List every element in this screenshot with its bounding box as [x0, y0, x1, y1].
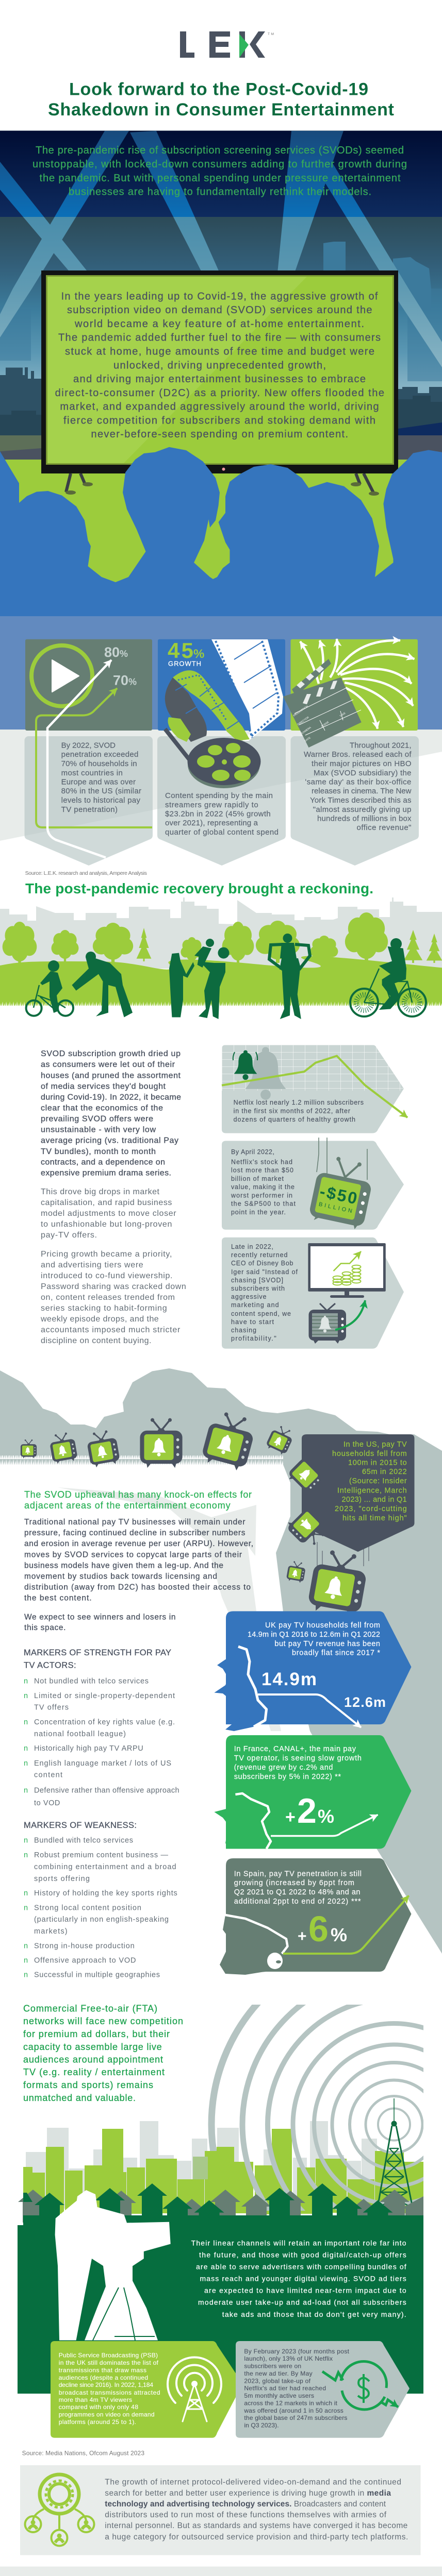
- stat card 3: Warner Bros. released each of: [304, 750, 412, 759]
- houses: [18, 2190, 423, 2227]
- panel: clapperboard illustration: [291, 639, 418, 731]
- heading: commercial FTA: Commercial Free-to-air (FTA): [23, 2003, 157, 2013]
- callout: public service broadcasting: transmissions that draw mass: [59, 2367, 146, 2374]
- stat card 3: Throughout 2021,: [350, 741, 412, 750]
- body text: SVOD growth: of media services they'd bought: [41, 1082, 166, 1091]
- panel: media technology: [20, 2465, 421, 2555]
- icon: falling TV with -$50 billion: BILLION: [318, 1201, 353, 1214]
- callout: Netflix ad tier: [236, 2341, 410, 2438]
- audience silhouettes: [0, 447, 442, 616]
- callout: Netflix stock: point in the year.: [231, 1209, 286, 1216]
- intro text: The pre-pandemic rise of subscription screening services (SVODs) seemed: [36, 145, 404, 156]
- callout: UK pay TV households: 14.9m: [261, 1669, 317, 1689]
- icons: tumbling TVs beside callout: [284, 1451, 370, 1618]
- cameraman silhouette: [55, 2190, 171, 2340]
- heading: commercial FTA: capacity to assemble large live: [23, 2042, 162, 2052]
- callout: Netflix ad tier: across the 12 markets in which it: [244, 2400, 338, 2407]
- body text: traditional pay TV: the best content.: [24, 1594, 92, 1603]
- text: linear channels: mass reach and younger digital viewing. SVOD ad tiers: [200, 2275, 406, 2283]
- radio tower: [378, 2098, 413, 2208]
- icon: falling TV with -$50 billion: -$50: [318, 1182, 359, 1208]
- text: linear channels: moderate user take-up and ad-load (not all subscribers: [198, 2298, 406, 2306]
- floor: [0, 460, 442, 583]
- callout: France CANAL+: %: [318, 1806, 334, 1827]
- callout: Netflix ad tier: in Q3 2023).: [244, 2421, 279, 2429]
- section heading: SVOD upheaval: The SVOD upheaval has many knock-on effects for: [24, 1489, 252, 1500]
- body text: SVOD growth: series stacking to habit-forming: [41, 1304, 167, 1313]
- callout: Disney profitability: Iger said "Instead of: [231, 1268, 298, 1276]
- callout: Netflix ad tier: 2023, global take-up of: [244, 2377, 311, 2384]
- panel: SVOD penetration illustration: 80%: [104, 645, 128, 660]
- stat card 1: penetration exceeded: [61, 750, 138, 759]
- callout: Netflix stock: value, making it the: [231, 1183, 294, 1191]
- stat card 1: Europe and was over: [61, 778, 136, 787]
- list: markers of weakness: Strong local content position: [34, 1904, 141, 1912]
- callout: Netflix ad tier: Netflix's ad tier had reached: [244, 2385, 326, 2392]
- panel: 45% growth illustration: GROWTH: [168, 659, 201, 668]
- callout: France CANAL+: +: [285, 1807, 296, 1827]
- callout: US pay TV households: 2023, "cord-cutting: [335, 1505, 407, 1513]
- stat card 2: quarter of global content spend: [165, 828, 279, 837]
- list: markers of weakness: n: [24, 1837, 28, 1845]
- body text: SVOD growth: contracts, and a dependence on: [41, 1158, 165, 1166]
- text: linear channels: are able to serve advertisers with compelling bundles of: [196, 2263, 406, 2271]
- body text: SVOD growth: and advertising tiers were: [41, 1261, 143, 1269]
- icons: falling TVs: [21, 1409, 296, 1472]
- text: linear channels: Their linear channels will retain an important role far into: [191, 2239, 406, 2247]
- list: markers of strength: n: [24, 1787, 28, 1795]
- body text: SVOD growth: unsustainable - with very low: [41, 1126, 156, 1134]
- body text: SVOD growth: SVOD subscription growth dried up: [41, 1049, 181, 1058]
- arrow lines: growth: [36, 660, 152, 857]
- body text: SVOD growth: This drove big drops in market: [41, 1188, 160, 1196]
- heading: commercial FTA: unmatched and valuable.: [23, 2093, 136, 2103]
- list: markers of weakness: Bundled with telco services: [34, 1837, 133, 1845]
- callout: Disney profitability: chasing [SVOD]: [231, 1277, 283, 1284]
- icon: clapperboard with bursting arrows: CAMERA: [301, 726, 312, 735]
- intro text: unstoppable, with locked-down consumers adding to further growth during: [32, 159, 407, 170]
- heading: commercial FTA: TV (e.g. reality / entertainment: [23, 2067, 165, 2077]
- map: Spain: [220, 1915, 290, 1975]
- callout: public service broadcasting: in the UK still dominates the list of: [59, 2359, 159, 2366]
- icon: clapperboard with bursting arrows: DATE: [304, 736, 312, 743]
- stat card 3: York Times described this as: [310, 796, 412, 805]
- text: media technology services: technology and advertising technology services. Broadcasters and content: [105, 2500, 386, 2509]
- list: markers of weakness: Offensive approach to VOD: [34, 1957, 136, 1965]
- text: linear channels: [191, 2239, 406, 2318]
- callout: public service broadcasting: programmes on video on demand: [59, 2411, 155, 2418]
- callout: Netflix stock: the S&P500 to that: [231, 1200, 296, 1208]
- illustration: park scene with families: [0, 897, 442, 1019]
- callout: Netflix stock: billion of market: [231, 1175, 284, 1182]
- callout: Disney profitability: aggressive: [231, 1293, 267, 1300]
- body text: SVOD growth: Password sharing was cracked down: [41, 1282, 186, 1291]
- callout: public service broadcasting: audiences (despite a continued: [59, 2374, 148, 2381]
- icon: clapperboard with bursting arrows: TAKE: [339, 711, 347, 718]
- panel: 45% growth illustration: 45: [168, 638, 193, 663]
- list: markers of weakness: [24, 1821, 177, 1979]
- icon: antenna: [168, 2357, 221, 2421]
- tv screen text: stuck at home, huge amounts of free time and budget were: [65, 346, 374, 358]
- icon: clapperboard with bursting arrows: [283, 639, 415, 748]
- stat card 2: $23.2bn in 2022 (45% growth: [165, 810, 271, 818]
- body text: SVOD growth: introduced to co-fund viewership.: [41, 1272, 172, 1280]
- callout: France CANAL+: In France, CANAL+, the main pay: [234, 1745, 356, 1753]
- callout: France CANAL+: TV operator, is seeing slow growth: [234, 1754, 362, 1762]
- list: markers of strength: Defensive rather than offensive approach: [34, 1787, 179, 1795]
- body text: SVOD growth: TV bundles), month to month: [41, 1147, 156, 1156]
- body text: traditional pay TV: Traditional national pay TV businesses will remain under: [24, 1518, 245, 1527]
- list: markers of strength: English language market / lots of US: [34, 1759, 171, 1768]
- list: markers of strength: TV offers: [34, 1704, 69, 1712]
- map: France: [214, 1793, 271, 1849]
- heading: commercial FTA: networks will face new competition: [23, 2016, 183, 2026]
- callout: Disney profitability: have to start: [231, 1318, 274, 1326]
- callout: US pay TV households: 65m in 2022: [362, 1468, 407, 1476]
- body text: traditional pay TV: business models have given them a leg-up. And the: [24, 1561, 223, 1570]
- callout: Disney profitability: recently returned: [231, 1251, 288, 1259]
- stat card 3: [291, 736, 419, 866]
- body text: SVOD growth: clear that the economics of the: [41, 1104, 163, 1113]
- list: markers of weakness: n: [24, 1904, 28, 1912]
- callout: France CANAL+: (revenue grew by c.2% and: [234, 1764, 333, 1772]
- body text: SVOD growth: during Covid-19). In 2022, it became: [41, 1093, 181, 1101]
- tv screen text: unlocked, driving unprecedented growth,: [113, 360, 326, 371]
- panel: SVOD penetration illustration: 70%: [113, 673, 137, 688]
- stat card 2: Content spending by the main: [165, 791, 273, 800]
- panel: 45% growth illustration: %: [193, 647, 204, 661]
- logo: L.E.K.: TM: [268, 32, 274, 36]
- body text: SVOD growth: expensive premium drama series.: [41, 1168, 171, 1177]
- text: media technology services: internal personnel. But as standards and systems have converged it has become: [105, 2521, 407, 2530]
- text: media technology services: distributors used to run most of these functions themselves with armies of: [105, 2511, 387, 2519]
- list: markers of weakness: n: [24, 1889, 28, 1897]
- callout: France CANAL+: subscribers by 5% in 2022) **: [234, 1773, 341, 1781]
- callout: US pay TV households: 100m in 2015 to: [348, 1459, 407, 1467]
- body text: SVOD growth: pay-TV offers.: [41, 1231, 97, 1240]
- body text: SVOD growth: model adjustments to move closer: [41, 1209, 176, 1218]
- stat card 1: most countries in: [61, 769, 123, 777]
- stat card 1: 70% of households in: [61, 759, 137, 768]
- tv screen text: In the years leading up to Covid-19, the aggressive growth of: [61, 291, 378, 302]
- stat card 2: over 2021), representing a: [165, 819, 258, 827]
- list: markers of strength: content: [34, 1771, 62, 1780]
- body text: SVOD growth: weekly episode drops, and the: [40, 1315, 159, 1324]
- callout: Netflix subscribers: dozens of quarters of healthy growth: [234, 1116, 355, 1123]
- text: linear channels: take ads and those that do don't get very many).: [222, 2310, 406, 2318]
- callout: US pay TV households: (Source: Insider: [349, 1477, 407, 1485]
- tv screen text: subscription video on demand (SVOD) services around the: [67, 304, 372, 316]
- stat card 1: TV penetration): [61, 805, 118, 814]
- callout: Netflix subscribers: in the first six months of 2022, after: [234, 1108, 350, 1115]
- list: markers of weakness: n: [24, 1971, 28, 1979]
- body text: SVOD growth: to unfashionable but long-proven: [41, 1220, 172, 1229]
- list: markers of weakness: combining entertainment and a broad: [34, 1863, 176, 1871]
- callout: public service broadcasting: Public Service Broadcasting (PSB): [59, 2352, 158, 2359]
- callout: Spain pay TV penetration: In Spain, pay TV penetration is still: [234, 1870, 362, 1878]
- callout: Netflix ad tier: was offered (around 1 in 50 across: [243, 2407, 343, 2414]
- heading: commercial FTA: [23, 2003, 183, 2103]
- heading: post-pandemic recovery: The post-pandemic recovery brought a reckoning.: [25, 880, 373, 896]
- stat card 3: office revenue": [357, 823, 412, 832]
- callout: Spain pay TV penetration: %: [331, 1924, 347, 1945]
- callout: UK pay TV households: 12.6m: [344, 1694, 386, 1710]
- icon: falling TV with -$50 billion: [308, 1154, 376, 1231]
- stat card 3: hundreds of millions in box: [317, 814, 412, 823]
- callout: public service broadcasting: decline since 2016). In 2022, 1,184: [59, 2381, 153, 2388]
- stat card 2: streamers grew rapidly to: [165, 801, 258, 809]
- list: markers of strength: Not bundled with telco services: [34, 1677, 149, 1686]
- heading: commercial FTA: for premium ad dollars, but their: [23, 2029, 170, 2039]
- callout: Netflix ad tier: subscribers were on: [244, 2362, 301, 2369]
- list: markers of weakness: MARKERS OF WEAKNESS:: [24, 1821, 137, 1830]
- callout: US pay TV households: hits all time high": [342, 1514, 407, 1522]
- callout: public service broadcasting: broadcast transmissions attracted: [59, 2389, 160, 2396]
- source note: Source: Media Nations, Ofcom August 2023: [22, 2450, 144, 2457]
- stat card 1: 80% in the US (similar: [61, 787, 141, 795]
- background band: production lull: [0, 2567, 442, 2576]
- list: markers of strength: n: [24, 1759, 28, 1768]
- tv screen text: The pandemic added further fuel to the fire — with consumers: [58, 332, 381, 344]
- callout: Disney profitability: profitability.": [231, 1335, 276, 1342]
- icon: gear and people: [25, 2475, 94, 2546]
- heading: commercial FTA: audiences around appointment: [23, 2055, 163, 2065]
- body text: traditional pay TV: We expect to see winners and losers in: [24, 1613, 175, 1621]
- callout: Netflix stock: lost more than $50: [231, 1167, 293, 1174]
- callout: Disney profitability: subscribers with: [231, 1285, 285, 1292]
- body text: SVOD growth: discipline on content buying.: [41, 1336, 152, 1345]
- stat card 3: Max (SVOD subsidiary) the: [314, 769, 412, 777]
- callout: Netflix stock: worst performer in: [231, 1192, 292, 1199]
- list: markers of weakness: markets): [34, 1927, 68, 1936]
- source note: Source: L.E.K. research and analysis, Ampere Analysis: [25, 870, 147, 876]
- text: media technology services: a huge category for outsourced service provision and third-party tech platforms.: [105, 2533, 408, 2541]
- stat card 3: releases in cinema. The New: [312, 787, 412, 795]
- callout: UK pay TV households: [214, 1611, 412, 1731]
- icon: old TV to streaming arrow: [308, 1300, 365, 1344]
- illustration: broadcast city skyline: [18, 2005, 423, 2394]
- list: markers of strength: national football league): [34, 1730, 126, 1738]
- callout: Disney profitability: chasing: [231, 1327, 256, 1334]
- family silhouettes: [26, 934, 426, 1019]
- callout: Netflix stock: Netflix's stock had: [231, 1159, 292, 1166]
- list: markers of weakness: sports offering: [34, 1875, 90, 1883]
- heading: commercial FTA: formats and sports) remains: [23, 2080, 153, 2090]
- stat card 1: [25, 660, 153, 866]
- list: markers of weakness: n: [24, 1942, 28, 1951]
- tv screen text: fierce competition for subscribers and stoking demand with: [63, 415, 375, 426]
- intro text: the pandemic. But with personal spending under pressure entertainment: [39, 173, 401, 184]
- stat card 2: [157, 736, 286, 866]
- list: markers of strength: n: [24, 1744, 28, 1753]
- list: markers of strength: Limited or single-property-dependent: [34, 1692, 175, 1700]
- text: media technology services: The growth of internet protocol-delivered video-on-demand and the continued: [105, 2478, 401, 2487]
- section heading: SVOD upheaval: [24, 1489, 252, 1511]
- text: media technology services: [105, 2478, 408, 2541]
- callout: Spain pay TV penetration: growing (increased by 6ppt from: [234, 1879, 354, 1887]
- callout: UK pay TV households: but pay TV revenue has been: [274, 1640, 380, 1648]
- callout: Netflix ad tier: the global base of 247m subscribers: [244, 2414, 347, 2421]
- callout: Netflix subscribers: [222, 1045, 407, 1133]
- callout: Netflix stock: [222, 1138, 404, 1231]
- text: linear channels: the future, and those with good digital/catch-up offers: [199, 2251, 406, 2259]
- tv screen text: direct-to-consumer (D2C) as a priority. New offers flooded the: [55, 387, 384, 399]
- list: markers of strength: MARKERS OF STRENGTH FOR PAY: [24, 1648, 171, 1657]
- callout: UK pay TV households: broadly flat since 2017 *: [292, 1649, 380, 1657]
- body text: traditional pay TV: moves by SVOD services to copycat large parts of their: [24, 1550, 242, 1559]
- body text: traditional pay TV: movement by studios back towards licensing and: [24, 1572, 217, 1581]
- text: linear channels: are expected to have limited near-term impact due to: [204, 2286, 406, 2295]
- callout: US pay TV households: 2023) ... and in Q1: [341, 1496, 407, 1504]
- stat card 3: 'same day' as their box-office: [305, 778, 411, 787]
- body text: SVOD growth: average pricing (vs. traditional Pay: [41, 1137, 178, 1145]
- section heading: SVOD upheaval: adjacent areas of the entertainment economy: [24, 1500, 231, 1511]
- list: markers of weakness: n: [24, 1851, 28, 1859]
- intro text: [32, 145, 407, 198]
- list: markers of weakness: History of holding the key sports rights: [34, 1889, 177, 1897]
- callout: Netflix ad tier: By February 2023 (four months post: [244, 2348, 350, 2355]
- logo: L.E.K.: [180, 31, 274, 58]
- body text: SVOD growth: prevailing SVOD offers were: [41, 1115, 153, 1124]
- callout: public service broadcasting: [51, 2341, 236, 2438]
- intro text: businesses are having to fundamentally rethink their models.: [69, 187, 371, 198]
- panel: SVOD penetration illustration: [25, 639, 152, 731]
- callout: UK pay TV households: UK pay TV households fell from: [265, 1621, 380, 1630]
- tv screen text: [55, 291, 384, 440]
- radio rings: [239, 2005, 423, 2211]
- callout: US pay TV households: Intelligence, March: [337, 1487, 407, 1495]
- body text: traditional pay TV: [24, 1518, 253, 1632]
- callout: Spain pay TV penetration: [220, 1858, 412, 1975]
- body text: SVOD growth: as consumers were let out of their: [41, 1060, 175, 1069]
- icon: dollar with zigzag arrow: [322, 2361, 398, 2410]
- tv set: [41, 270, 398, 496]
- list: markers of weakness: n: [24, 1957, 28, 1965]
- callout: Netflix ad tier: launch), only 13% of UK Netflix: [244, 2355, 333, 2362]
- list: markers of strength: n: [24, 1692, 28, 1700]
- callout: France CANAL+: [214, 1735, 412, 1849]
- list: markers of strength: [24, 1648, 179, 1807]
- callout: Disney profitability: content spend, we: [231, 1310, 291, 1317]
- list: markers of weakness: Strong in-house production: [34, 1942, 135, 1951]
- body text: SVOD growth: houses (and pruned the assortment: [41, 1071, 181, 1080]
- callout: Disney profitability: CEO of Disney Bob: [231, 1260, 293, 1267]
- list: markers of weakness: (particularly in non english-speaking: [34, 1916, 169, 1924]
- body text: traditional pay TV: and erosion in average revenue per user (ARPU). However,: [24, 1539, 253, 1548]
- callout: Disney profitability: marketing and: [231, 1301, 279, 1309]
- callout: Netflix stock: By April 2022,: [231, 1148, 274, 1156]
- icon: film strip and reel: [165, 639, 283, 788]
- stat card 1: By 2022, SVOD: [61, 741, 116, 750]
- icon: monitor with growth chart: [308, 1243, 386, 1298]
- tv screen text: market, and expanded aggressively around the world, driving: [60, 401, 379, 413]
- body text: traditional pay TV: pressure, facing continued decline in subscriber numbers: [24, 1529, 245, 1537]
- icon: clapperboard with bursting arrows: DIRECTOR: [297, 716, 310, 726]
- list: markers of strength: n: [24, 1718, 28, 1726]
- callout: public service broadcasting: compared with only only 48: [59, 2403, 138, 2411]
- body text: SVOD growth: capitalisation, and rapid business: [41, 1198, 172, 1207]
- tv screen text: world became a key feature of at-home entertainment.: [74, 318, 364, 330]
- body text: SVOD growth: accountants imposed much stricter: [41, 1326, 181, 1334]
- callout: Spain pay TV penetration: +: [298, 1928, 307, 1945]
- stat card 3: "almost assuredly giving up: [313, 805, 412, 814]
- list: markers of strength: to VOD: [34, 1799, 60, 1807]
- callout: Disney profitability: Late in 2022,: [231, 1243, 273, 1250]
- callout: Netflix ad tier: the new ad tier. By May: [244, 2370, 313, 2377]
- callout: Netflix subscribers: Netflix lost nearly 1.2 million subscribers: [234, 1099, 364, 1106]
- list: markers of weakness: Successful in multiple geographies: [34, 1971, 160, 1979]
- tv screen text: never-before-seen spending on premium content.: [91, 429, 348, 440]
- callout: Disney profitability: [222, 1238, 404, 1349]
- callout: US pay TV households: In the US, pay TV: [343, 1440, 407, 1449]
- map: UK: [214, 1647, 267, 1731]
- body text: SVOD growth: [40, 1049, 186, 1345]
- callout: France CANAL+: 2: [297, 1791, 317, 1831]
- callout: public service broadcasting: platforms (around 25 to 1).: [59, 2418, 136, 2426]
- body text: SVOD growth: on, content releases trended from: [41, 1293, 175, 1302]
- stat card 1: levels to historical pay: [61, 796, 140, 805]
- callout: Spain pay TV penetration: 6: [308, 1909, 329, 1949]
- list: markers of strength: Historically high pay TV ARPU: [34, 1744, 143, 1753]
- list: markers of strength: TV ACTORS:: [24, 1661, 76, 1670]
- background: storm cloud and bolt: [0, 1368, 442, 1954]
- panel: 45% growth illustration: [158, 638, 285, 731]
- body text: SVOD growth: Pricing growth became a priority,: [41, 1250, 172, 1259]
- icon: clapperboard with bursting arrows: SCENE: [321, 720, 330, 728]
- callout: US pay TV households: [302, 1434, 415, 1552]
- title: Look forward to the Post-Covid-19: [69, 80, 368, 99]
- list: markers of weakness: Robust premium content business —: [34, 1851, 168, 1859]
- hero panel: night sky, beams, skyline and TV: [0, 130, 442, 460]
- tv screen text: and driving major entertainment businesses to embrace: [73, 374, 366, 385]
- title: Shakedown in Consumer Entertainment: [48, 100, 394, 120]
- callout: US pay TV households: households fell from: [332, 1450, 407, 1458]
- callout: Netflix ad tier: 5m monthly active users: [244, 2392, 314, 2399]
- body text: traditional pay TV: this space.: [24, 1623, 66, 1632]
- icon: clapperboard with bursting arrows: PRODUCTION: [293, 705, 309, 718]
- callout: public service broadcasting: more than 4m TV viewers: [59, 2396, 132, 2403]
- callout: Spain pay TV penetration: additional 2ppt to end of 2022) ***: [234, 1897, 361, 1906]
- title: [48, 80, 394, 120]
- list: markers of strength: Concentration of key rights value (e.g.: [34, 1718, 175, 1726]
- stat card 3: their major pictures on HBO: [312, 759, 412, 768]
- callout: UK pay TV households: 14.9m in Q1 2016 to 12.6m in Q1 2022: [248, 1631, 380, 1639]
- callout: Spain pay TV penetration: Q2 2021 to Q1 2022 to 48% and an: [234, 1888, 360, 1896]
- list: markers of strength: n: [24, 1677, 28, 1686]
- stats band background: [0, 616, 442, 841]
- text: media technology services: search for better and better user experience is driving huge growth in media: [105, 2489, 391, 2498]
- body text: traditional pay TV: distribution (away from D2C) has boosted their access to: [24, 1583, 251, 1592]
